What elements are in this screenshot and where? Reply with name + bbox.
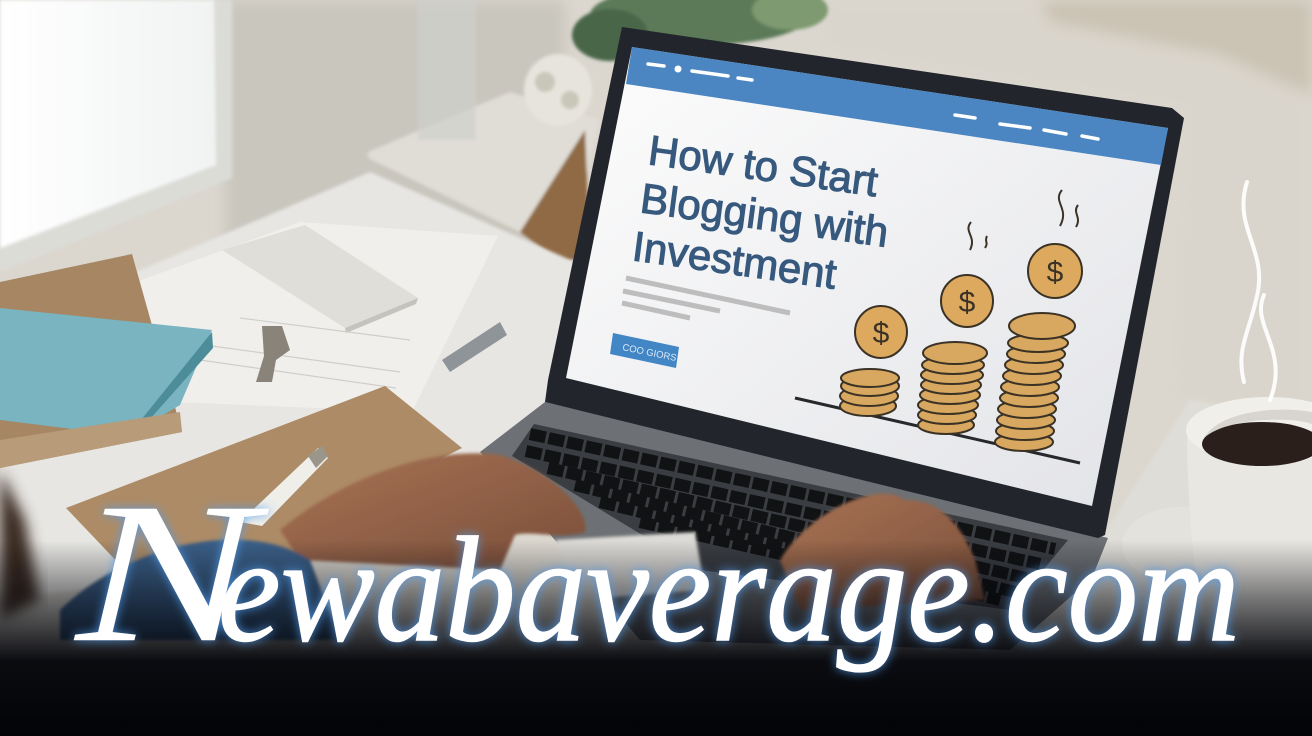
stack 1 [840, 369, 899, 416]
website nav bar [626, 47, 1168, 165]
title: Newabaverage.com [73, 463, 1240, 684]
kraft notebook and pen [66, 386, 462, 580]
title: Newabaverage.com: N [73, 463, 269, 684]
stack 3 [995, 313, 1075, 451]
call to action button [610, 333, 679, 368]
coin stacks chart: $ [1047, 256, 1064, 289]
coffee cup with steam [1122, 182, 1312, 640]
dark bottom gradient [0, 540, 1312, 736]
laptop base and keyboard: Newabaverage [782, 446, 829, 463]
dollar coins [855, 244, 1082, 358]
coin stacks chart: $ [873, 317, 890, 350]
coin stacks chart [795, 190, 1082, 463]
laptop lid [545, 27, 1184, 538]
coin stacks chart: $ [959, 286, 976, 319]
placeholder text lines [622, 278, 790, 318]
call to action button: COO GIORS [621, 342, 677, 364]
steam [1241, 182, 1276, 400]
papers and clipboard [136, 222, 507, 412]
laptop base and keyboard [480, 402, 1108, 650]
person's shoulder shadow at left [0, 470, 40, 620]
screen heading: How to Start [646, 126, 881, 205]
notebooks stack [0, 254, 213, 468]
screen heading [630, 126, 891, 298]
rising steam marks [968, 190, 1078, 250]
desk surface [0, 172, 1312, 640]
side shelf with plant and vase [368, 0, 828, 262]
screen heading: Blogging with [638, 174, 891, 256]
hands on keyboard [60, 453, 985, 640]
screen heading: Investment [630, 222, 840, 298]
title: Newabaverage.com: ewabaverage.com [218, 507, 1240, 673]
stack 2 [918, 342, 987, 434]
window [0, 0, 232, 272]
